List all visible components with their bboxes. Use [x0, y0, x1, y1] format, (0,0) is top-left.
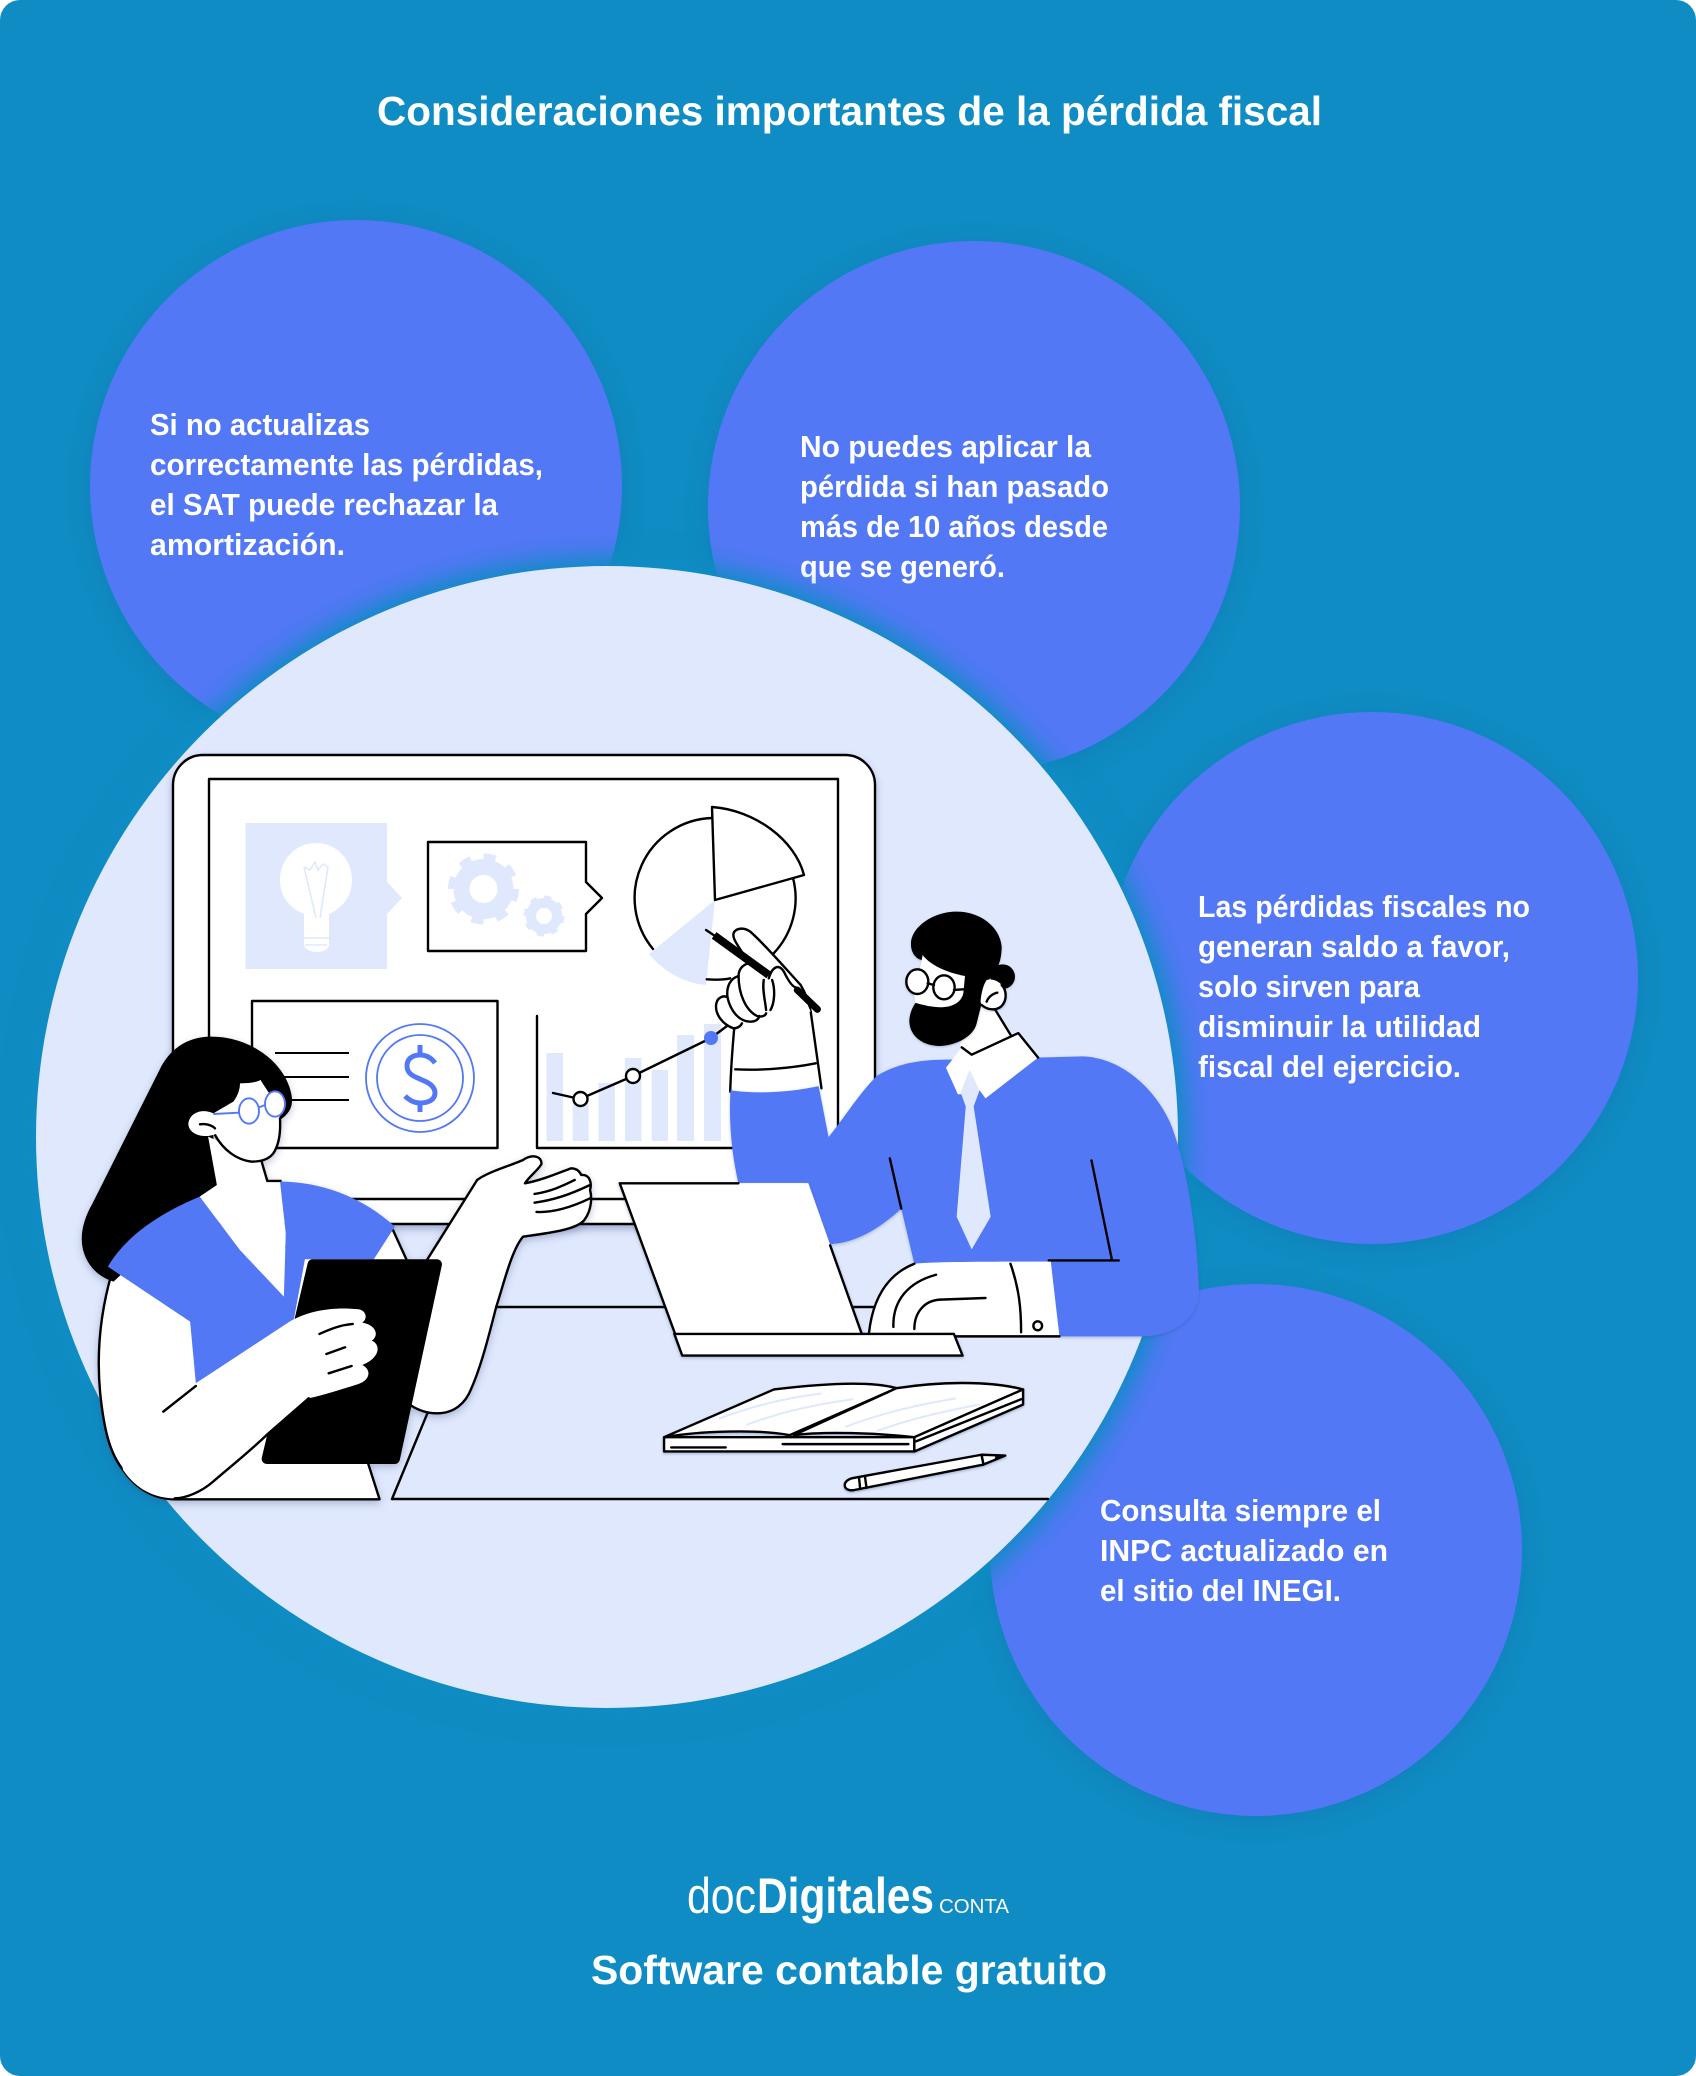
woman front arm and hand	[110, 1308, 378, 1498]
man	[706, 912, 1199, 1336]
icon: gears box	[428, 842, 602, 951]
line and bar chart	[537, 1016, 745, 1148]
icon: light bulb panel	[246, 823, 402, 969]
pen	[714, 935, 769, 975]
panel: circle note 4	[990, 1284, 1522, 1816]
man tie	[957, 1070, 991, 1249]
logo: docDigitales CONTA: doc	[687, 1868, 756, 1924]
panel: circle note 2: No puedes aplicar la	[800, 429, 1092, 464]
title: Consideraciones importantes de la pérdida fiscal	[377, 88, 1322, 134]
man resting forearm	[869, 1262, 1059, 1336]
panel: circle note 2: más de 10 años desde	[800, 509, 1108, 544]
panel: circle note 1	[90, 220, 622, 752]
panel: circle note 3: disminuir la utilidad	[1198, 1009, 1481, 1044]
tagline: Software contable gratuito	[591, 1947, 1107, 1993]
man neck	[960, 1007, 1011, 1054]
woman body	[99, 1230, 406, 1499]
woman neck	[200, 1137, 286, 1297]
logo: docDigitales CONTA: Digitales	[757, 1868, 934, 1924]
woman	[82, 1037, 591, 1499]
panel: circle note 4: Consulta siempre el	[1100, 1493, 1381, 1528]
panel: circle note 1: correctamente las pérdidas,	[150, 447, 543, 482]
man raised forearm and hand	[706, 929, 822, 1093]
pencil	[845, 1455, 1005, 1490]
logo: docDigitales CONTA: CONTA	[939, 1896, 1010, 1918]
panel: circle note 3: fiscal del ejercicio.	[1198, 1049, 1461, 1084]
panel: circle note 3: solo sirven para	[1198, 969, 1421, 1004]
logo: docDigitales CONTA	[687, 1868, 1010, 1924]
tablet	[267, 1264, 437, 1459]
desk	[392, 1307, 1048, 1499]
woman hair	[82, 1037, 292, 1282]
panel: circle note 1: Si no actualizas	[150, 407, 370, 442]
pie chart	[635, 807, 804, 985]
open book	[664, 1383, 1023, 1451]
woman back arm and open hand	[410, 1156, 591, 1413]
laptop	[620, 1183, 963, 1356]
panel: large illustration circle	[36, 566, 1178, 1708]
man head	[906, 912, 1015, 1046]
monitor presentation board	[173, 755, 875, 1224]
panel: circle note 2	[708, 241, 1240, 773]
panel: circle note 3	[1106, 712, 1638, 1244]
woman blouse	[108, 1182, 395, 1383]
panel: circle note 3: generan saldo a favor,	[1198, 929, 1510, 964]
dollar box	[252, 1001, 498, 1148]
panel: circle note 2: pérdida si han pasado	[800, 469, 1109, 504]
woman glasses	[213, 1091, 285, 1124]
woman head	[188, 1080, 285, 1181]
panel: circle note 4: el sitio del INEGI.	[1100, 1573, 1341, 1608]
panel: circle note 4: INPC actualizado en	[1100, 1533, 1388, 1568]
man collar	[946, 1033, 1038, 1098]
panel: circle note 1: el SAT puede rechazar la	[150, 487, 499, 522]
man shirt	[730, 1056, 1199, 1336]
panel: circle note 1: amortización.	[150, 527, 345, 562]
panel: circle note 3: Las pérdidas fiscales no	[1198, 889, 1530, 924]
panel: circle note 2: que se generó.	[800, 549, 1005, 584]
